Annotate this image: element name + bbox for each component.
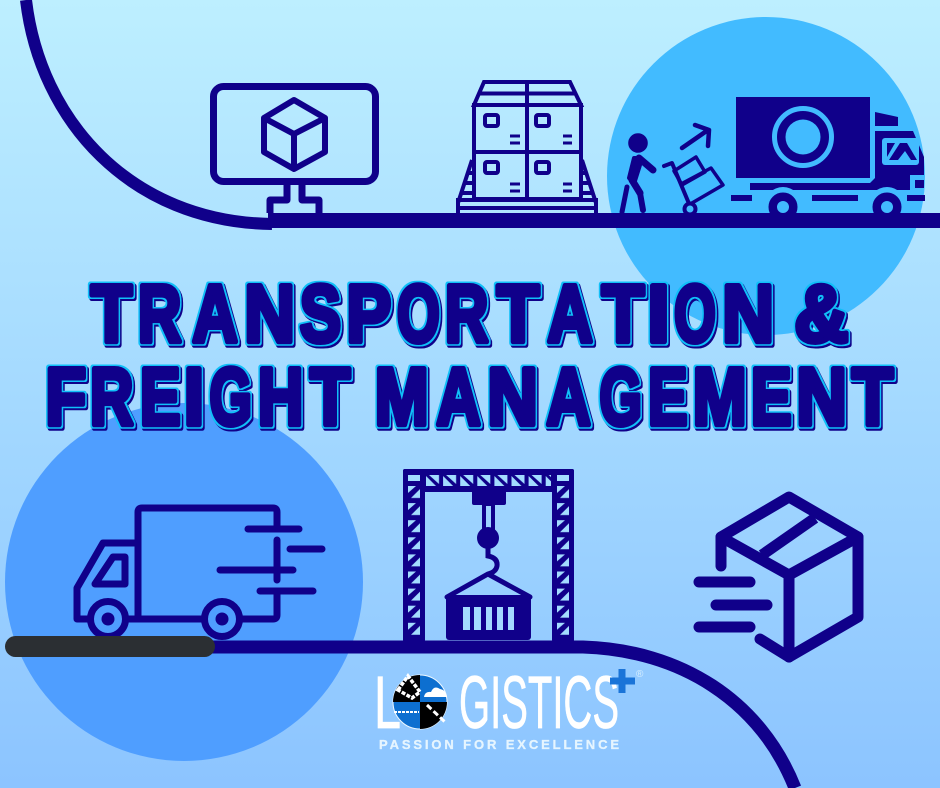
title line 2 bbox=[45, 353, 893, 443]
circle: top right bbox=[607, 17, 925, 335]
title line 1: T bbox=[602, 270, 644, 360]
title line 1: N bbox=[722, 270, 774, 360]
logo wordmark bbox=[374, 661, 619, 744]
logo plus sign bbox=[610, 669, 635, 693]
icon: palletized boxes bbox=[458, 81, 596, 213]
title line 1: O bbox=[674, 270, 716, 360]
title line 1: P bbox=[346, 270, 391, 360]
title line 2: M bbox=[375, 353, 429, 443]
title line 1: O bbox=[397, 270, 440, 360]
title line 2: N bbox=[487, 353, 538, 443]
bottom road line and curve bbox=[200, 647, 795, 788]
title line 2: G bbox=[600, 353, 642, 443]
title line 2: M bbox=[693, 353, 747, 443]
dark road end pill bbox=[5, 636, 215, 657]
title line 1: I bbox=[647, 270, 670, 360]
logo wordmark: L bbox=[374, 661, 401, 744]
title line 2: T bbox=[310, 353, 350, 443]
title line 1: T bbox=[91, 270, 132, 360]
icon: delivery truck with logo bbox=[731, 97, 925, 228]
logo: Logistics Plus bbox=[374, 661, 644, 752]
logo wordmark: GISTICS bbox=[459, 661, 619, 744]
title line 2: A bbox=[436, 353, 481, 443]
title line 2: E bbox=[140, 353, 181, 443]
title line 2: R bbox=[90, 353, 133, 443]
title line 1: S bbox=[300, 270, 341, 360]
title line 2: H bbox=[258, 353, 303, 443]
title line 2: F bbox=[45, 353, 86, 443]
icon: monitor with cube bbox=[214, 86, 376, 213]
title line 2: N bbox=[796, 353, 847, 443]
logo globe bbox=[393, 675, 447, 729]
icon: moving truck bbox=[77, 508, 322, 636]
title line 2: G bbox=[210, 353, 252, 443]
icon: fast-moving parcel box bbox=[699, 497, 858, 657]
title line 1: A bbox=[547, 270, 593, 360]
title bbox=[45, 270, 893, 443]
registered mark: ® bbox=[636, 669, 644, 680]
title line 1 bbox=[91, 270, 848, 360]
top road curve and line bbox=[26, 0, 272, 224]
title line 1: & bbox=[794, 270, 848, 360]
title line 2: T bbox=[852, 353, 893, 443]
title line 1: N bbox=[244, 270, 295, 360]
title line 2: I bbox=[184, 353, 204, 443]
title line 2: E bbox=[648, 353, 688, 443]
icon: person with hand truck bbox=[622, 125, 723, 214]
title line 2: A bbox=[546, 353, 591, 443]
icon: gantry crane with container bbox=[403, 469, 574, 642]
circle: bottom left bbox=[5, 403, 363, 761]
title line 1: T bbox=[497, 270, 539, 360]
title line 1: A bbox=[192, 270, 238, 360]
title line 1: R bbox=[445, 270, 488, 360]
title line 2: E bbox=[751, 353, 792, 443]
title line 1: R bbox=[138, 270, 181, 360]
top road line bbox=[268, 213, 940, 228]
logo tagline: PASSION FOR EXCELLENCE bbox=[379, 737, 619, 752]
